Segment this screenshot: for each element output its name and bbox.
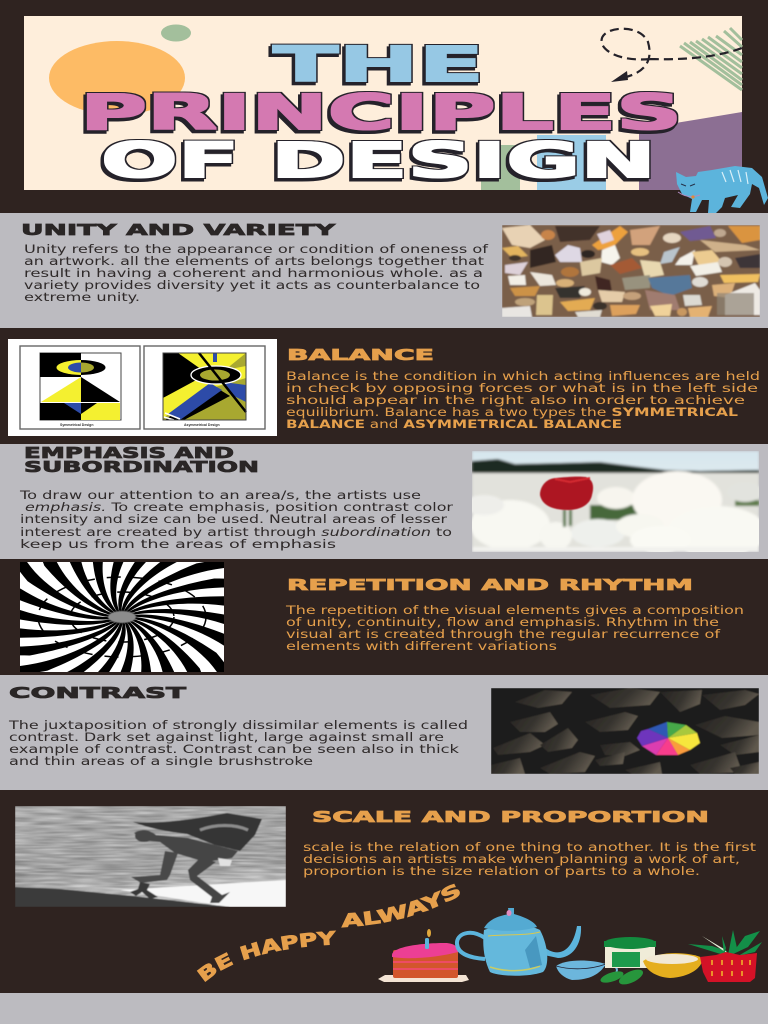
heading: SUBORDINATION xyxy=(24,458,259,476)
curved text: be happy always: ALWAYS xyxy=(341,884,460,928)
body text: result in having a coherent and harmonious whole. as a xyxy=(24,266,483,280)
image: symmetrical and asymmetrical design xyxy=(8,339,277,436)
icon: green jar xyxy=(604,937,656,968)
body text xyxy=(19,488,453,551)
body text: extreme unity. xyxy=(24,290,140,304)
icon: green pickles xyxy=(599,967,645,987)
body text xyxy=(8,718,468,768)
heading: EMPHASIS AND xyxy=(24,444,234,462)
image: symmetrical and asymmetrical design: Symmetrical Design xyxy=(60,423,93,427)
icon: potted plant xyxy=(688,930,762,982)
heading: CONTRAST xyxy=(9,684,187,702)
body text: of unity, continuity, flow and emphasis. Rhythm in the xyxy=(286,615,719,629)
image: rainbow umbrella among black umbrellas xyxy=(491,688,759,774)
body text: Unity refers to the appearance or condition of oneness of xyxy=(24,242,489,256)
body text: variety provides diversity yet it acts as counterbalance to xyxy=(24,278,480,292)
body text: emphasis. To create emphasis, position contrast color xyxy=(25,500,453,514)
image: symmetrical and asymmetrical design: Asymmetrical Design xyxy=(184,423,220,427)
image: black and white spiral xyxy=(20,562,224,672)
panel: balance xyxy=(8,339,760,436)
panel: contrast xyxy=(8,684,759,774)
body text: should appear in the right also in order to achieve xyxy=(286,393,745,407)
panel: unity and variety xyxy=(21,221,760,317)
panel: emphasis and subordination xyxy=(19,444,767,558)
icon: birthday cake xyxy=(378,929,469,982)
heading: SCALE AND PROPORTION xyxy=(312,808,709,826)
panel: repetition and rhythm xyxy=(20,562,743,672)
body text: The juxtaposition of strongly dissimilar elements is called xyxy=(8,718,468,732)
image: red flower among white flowers xyxy=(472,451,759,552)
heading xyxy=(24,444,259,476)
body text: The repetition of the visual elements gives a composition xyxy=(285,603,744,617)
icon: yellow bowl xyxy=(643,953,703,978)
heading: UNITY AND VARIETY xyxy=(21,221,336,239)
image: figure carrying a giant shoe xyxy=(15,806,286,907)
body text xyxy=(24,242,489,304)
body text: decisions an artists make when planning a work of art, xyxy=(303,852,740,866)
title text: OF DESIGN xyxy=(101,133,656,189)
body text: scale is the relation of one thing to another. It is the first xyxy=(303,840,757,854)
body text: an artwork. all the elements of arts belongs together that xyxy=(24,254,485,268)
body text: equilibrium. Balance has a two types the SYMMETRICAL xyxy=(286,405,739,419)
title text: PRINCIPLES xyxy=(80,85,682,141)
body text: BALANCE and ASYMMETRICAL BALANCE xyxy=(286,417,622,431)
icon: blue teapot xyxy=(457,908,581,976)
body text: Balance is the condition in which acting influences are held xyxy=(286,369,760,383)
body text: contrast. Dark set against light, large against small are xyxy=(9,730,444,744)
icon: blue cat xyxy=(676,166,768,213)
body text: To draw our attention to an area/s, the artists use xyxy=(19,488,421,502)
body text: visual art is created through the regular recurrence of xyxy=(286,627,721,641)
body text: keep us from the areas of emphasis xyxy=(20,537,336,551)
body text: interest are created by artist through subordination to xyxy=(20,525,452,539)
body text xyxy=(303,840,757,878)
heading: BALANCE xyxy=(287,346,434,364)
title text: THE xyxy=(273,37,484,93)
body text xyxy=(285,603,744,653)
body text: intensity and size can be used. Neutral areas of lesser xyxy=(20,512,447,526)
body text xyxy=(286,369,760,431)
body text: elements with different variations xyxy=(286,639,557,653)
panel: scale and proportion xyxy=(15,806,757,907)
title banner xyxy=(24,16,742,190)
icon: blue cup xyxy=(556,960,617,980)
heading: REPETITION AND RHYTHM xyxy=(287,576,693,594)
image: shells and pebbles xyxy=(502,225,760,317)
body text: and thin areas of a single brushstroke xyxy=(9,754,313,768)
body text: proportion is the size relation of parts to a whole. xyxy=(303,864,700,878)
title text xyxy=(80,37,682,189)
body text: in check by opposing forces or what is in the left side xyxy=(286,381,758,395)
body text: example of contrast. Contrast can be seen also in thick xyxy=(9,742,459,756)
curved text: be happy always: BE HAPPY xyxy=(196,930,336,982)
curved text: be happy always xyxy=(196,884,460,982)
